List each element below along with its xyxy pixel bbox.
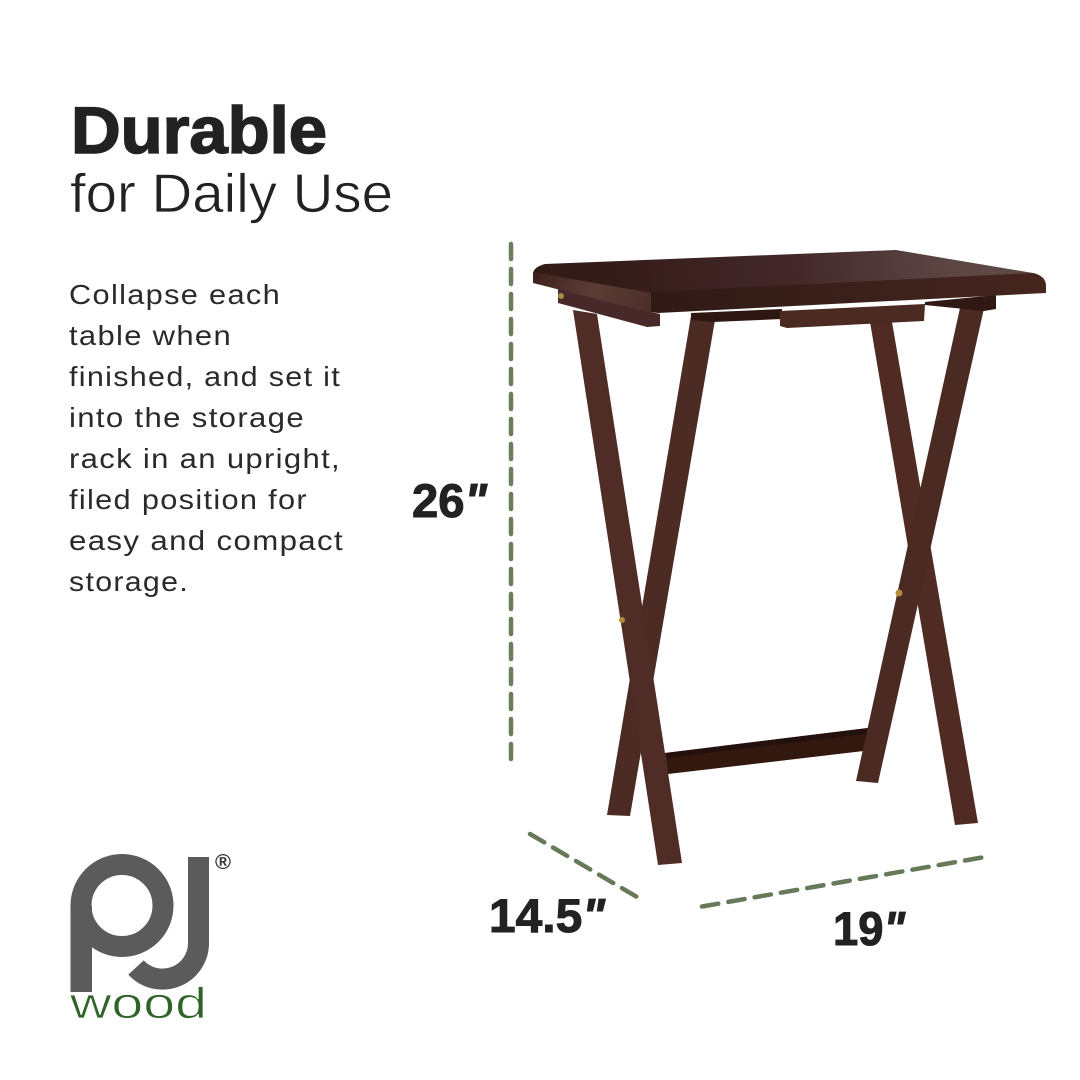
dimension label: 26 inches: 26" <box>412 474 488 527</box>
body text block: storage. <box>69 566 189 597</box>
body text block: easy and compact <box>69 525 344 556</box>
dimension line: width <box>702 858 982 906</box>
under rail right <box>925 295 996 311</box>
word: wood: wood <box>69 979 207 1028</box>
body text block: Collapse each <box>69 279 281 310</box>
under rail <box>691 309 782 322</box>
title <box>70 93 393 224</box>
body text block: into the storage <box>69 402 305 433</box>
heading: Durable: Durable <box>71 93 327 167</box>
leg: right rear <box>870 322 978 825</box>
dimension label: 14.5 inches: 14.5" <box>489 889 606 942</box>
body text block: rack in an upright, <box>69 443 341 474</box>
dimension label: 19 inches: 19" <box>833 902 906 955</box>
leg: right front <box>856 304 985 783</box>
table front edge <box>651 273 1046 313</box>
body text block <box>69 279 344 597</box>
bolt: right leg <box>896 590 902 596</box>
dimension line: depth <box>530 834 637 897</box>
leg: left rear <box>607 316 715 816</box>
side apron <box>558 288 660 327</box>
table top surface <box>533 250 1041 294</box>
body text block: table when <box>69 320 232 351</box>
logo: PJ Wood <box>69 851 232 1028</box>
registered mark: ® <box>215 851 232 874</box>
body text block: finished, and set it <box>69 361 341 392</box>
table left edge <box>533 272 651 313</box>
letter j <box>136 857 199 979</box>
crossbar <box>665 728 872 774</box>
subheading: for Daily Use: for Daily Use <box>70 162 393 224</box>
bolt: left leg <box>619 617 625 623</box>
dimension line: height <box>509 244 513 768</box>
folding table illustration <box>533 250 1046 865</box>
apron bolt <box>558 293 564 299</box>
centre stretcher <box>780 304 925 328</box>
leg: left front <box>573 310 682 865</box>
letter p <box>70 864 163 992</box>
body text block: filed position for <box>69 484 308 515</box>
